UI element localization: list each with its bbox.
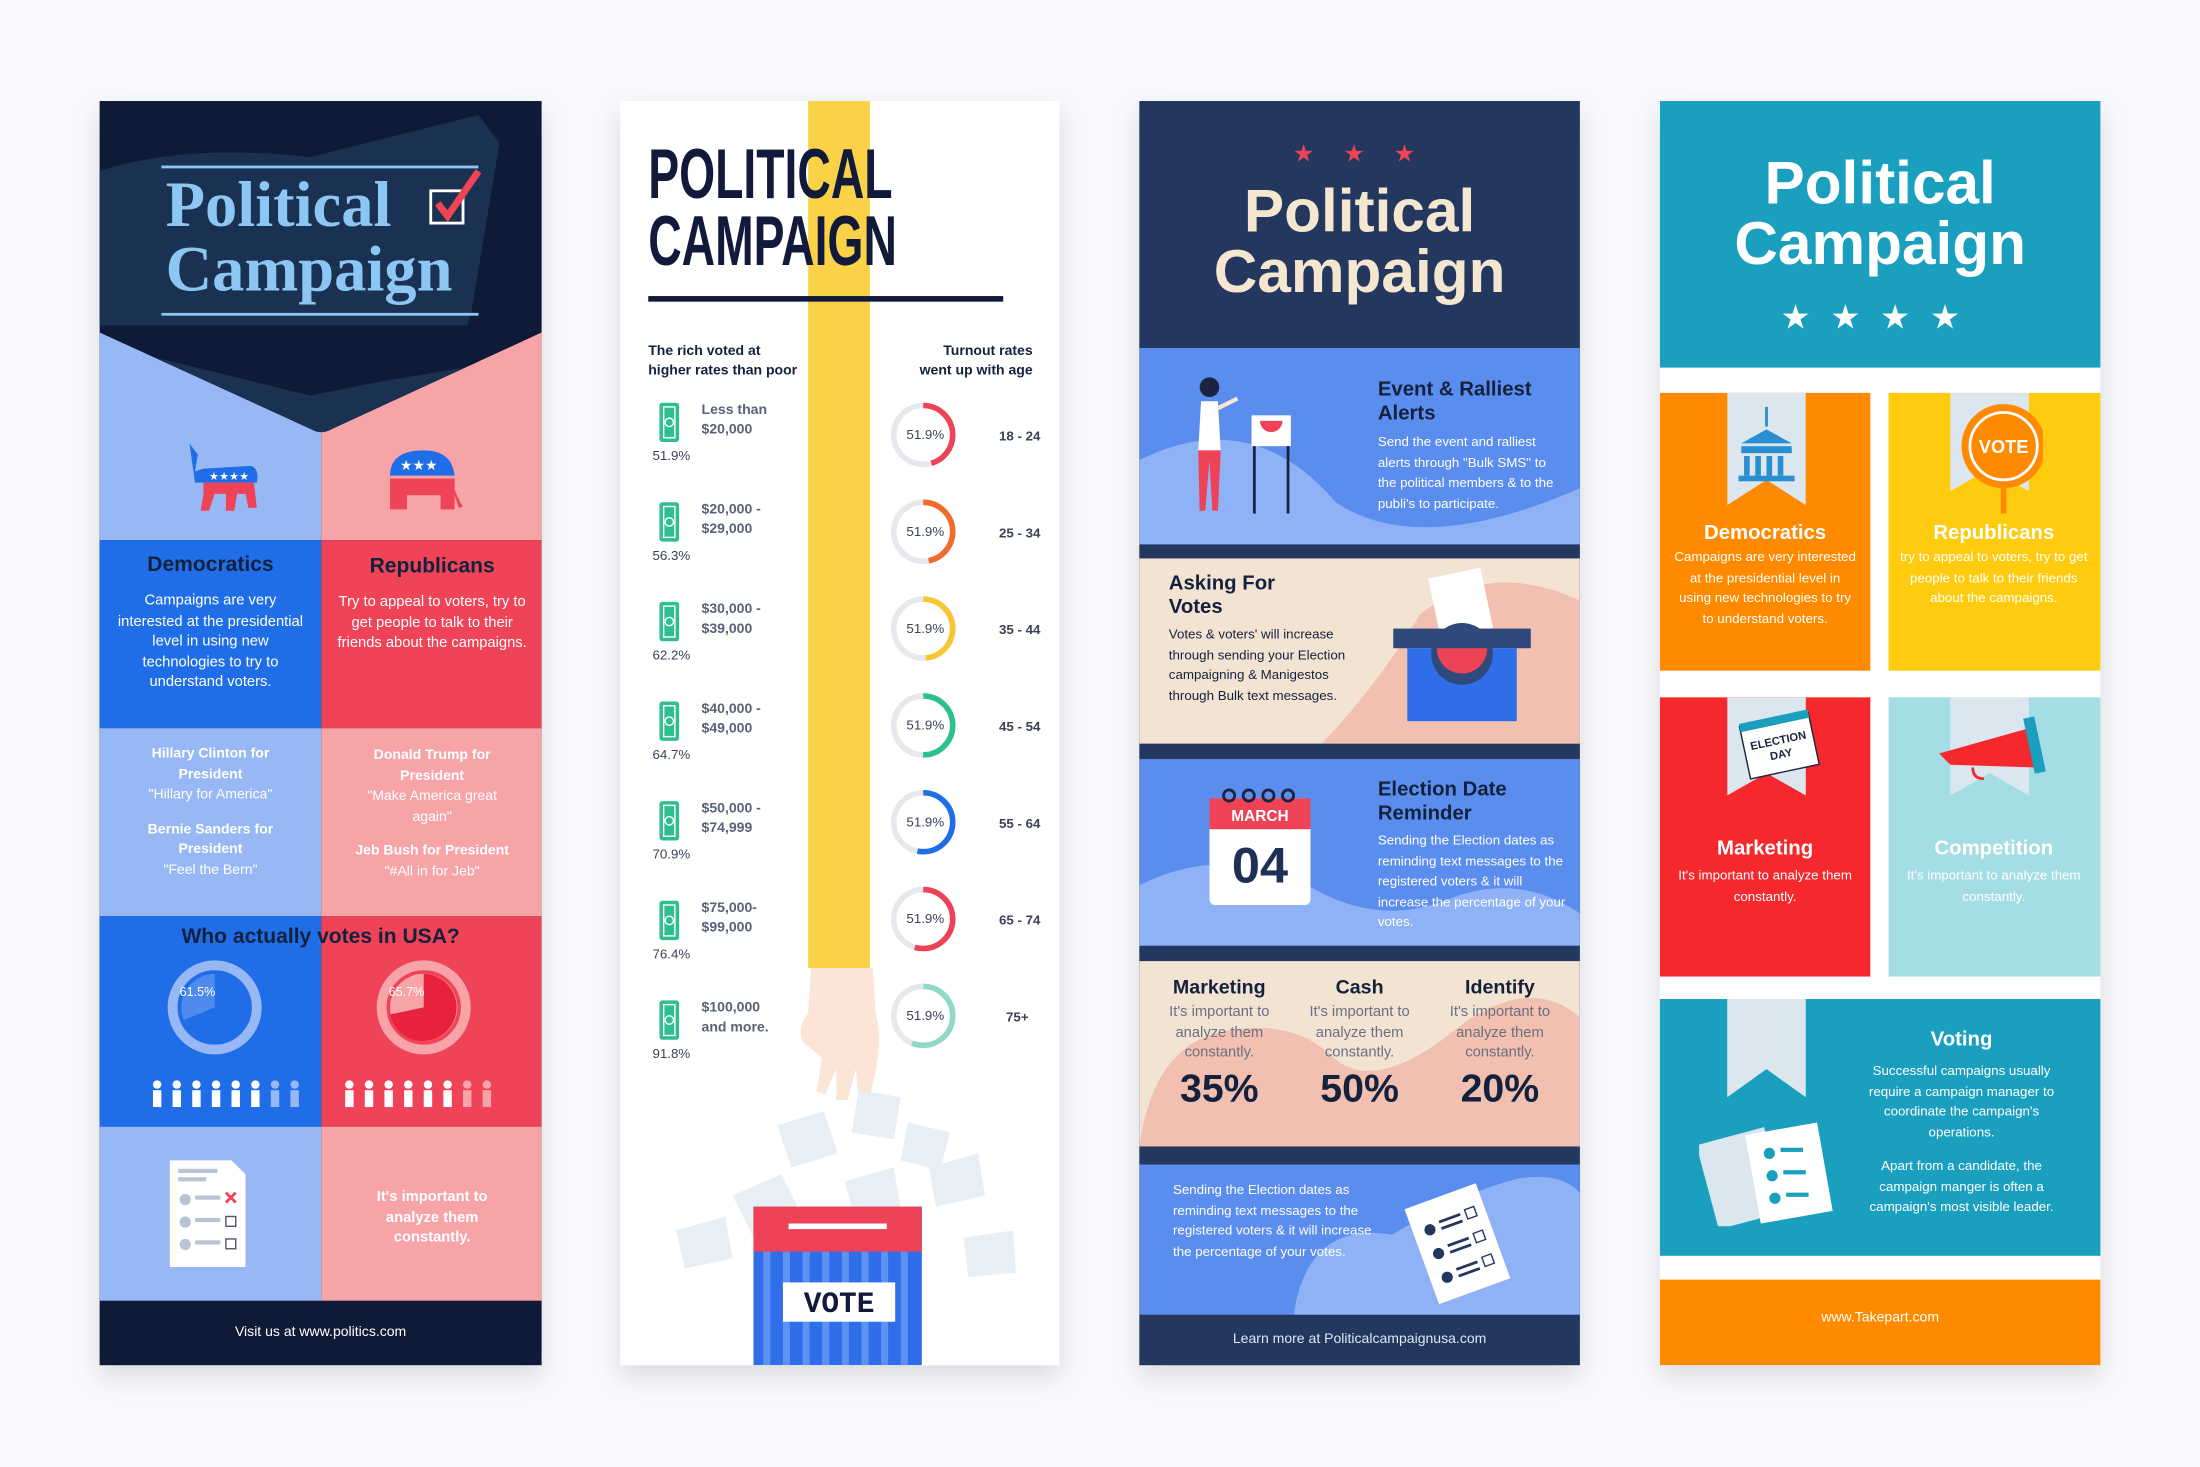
heading: turnout rates: went up with age xyxy=(920,363,1033,379)
panel: democrats vs republicans xyxy=(100,101,542,1365)
text block: democrat candidates xyxy=(148,746,273,878)
text block: republican candidates xyxy=(355,748,509,879)
section: stats: 20% xyxy=(1461,1066,1539,1109)
section: stats: 50% xyxy=(1320,1066,1399,1109)
chart: age donuts: 55 - 64 xyxy=(999,816,1041,831)
icon: people rows xyxy=(152,1080,492,1108)
tile: democratics: Campaigns are very interested at the presidential level in using new technologies to try to understand voters. xyxy=(1674,550,1856,626)
tile: voting: Voting xyxy=(1931,1028,1992,1051)
tile: marketing: ELECTION xyxy=(1749,729,1807,753)
icon: donkey xyxy=(190,444,258,511)
heading: rich voted xyxy=(648,344,797,379)
section: stats: 35% xyxy=(1180,1066,1259,1109)
chart: age donuts: 35 - 44 xyxy=(999,622,1041,637)
footer: Learn more at Politicalcampaignusa.com xyxy=(1233,1332,1486,1347)
chart: age donuts: 51.9% xyxy=(906,1008,944,1023)
panel: tiles xyxy=(1660,101,2100,1365)
panel: alerts and reminders xyxy=(1139,101,1580,1365)
section: election date reminder: Election Date Reminder xyxy=(1378,779,1507,825)
background color blocks xyxy=(100,115,542,1301)
chart: republican donut xyxy=(376,960,471,1054)
section: election date reminder: Sending the Election dates as reminding text messages to the registered voters & it will increase the percentage of your votes. xyxy=(1378,833,1565,930)
chart: age donuts: 18 - 24 xyxy=(999,429,1041,444)
text block: important: It's important to analyze them constantly. xyxy=(377,1188,488,1246)
text block: republican candidates: "#All in for Jeb" xyxy=(385,864,480,879)
section: stats: It's important to analyze them constantly. xyxy=(1309,1003,1410,1061)
tile: marketing: DAY xyxy=(1769,747,1794,763)
chart: age donuts xyxy=(891,402,1041,1048)
title: Political xyxy=(1244,178,1475,246)
tile: competition: Competition xyxy=(1934,838,2053,860)
footer: Visit us at www.politics.com xyxy=(235,1325,406,1340)
panel: rich vs poor turnout xyxy=(620,101,1059,1365)
chart: income rows: 62.2% xyxy=(652,648,690,664)
heading: rich voted: higher rates than poor xyxy=(648,363,797,379)
section: stats: Identify xyxy=(1465,975,1535,998)
tile: democratics: Democratics xyxy=(1704,522,1826,544)
section: event alerts: Event & Ralliest Alerts xyxy=(1378,379,1532,425)
section: asking for votes: Votes & voters' will increase through sending your Election campaigning & Manigestos through Bulk text messages. xyxy=(1169,627,1345,704)
text block: democrat candidates: Hillary Clinton for President xyxy=(152,746,269,782)
heading: turnout rates: Turnout rates xyxy=(943,344,1033,359)
icon: donkey: ★★★★ xyxy=(209,471,249,483)
header: Political xyxy=(1764,150,1996,217)
text block: democrat candidates: "Hillary for America" Bernie Sanders for President xyxy=(148,787,273,857)
section: stats xyxy=(1139,961,1580,1146)
tile: democratics xyxy=(1660,393,1870,671)
section: asking for votes: Votes xyxy=(1169,596,1223,619)
chart: income rows: $40,000 - $49,000 xyxy=(702,702,761,736)
text block: republican candidates: "Make America great again" Jeb Bush for President xyxy=(355,789,509,859)
title: Political xyxy=(166,168,391,240)
chart: age donuts: 51.9% xyxy=(906,524,944,539)
chart: income rows: $20,000 - $29,000 xyxy=(702,502,761,537)
chart: income rows: $50,000 - $74,999 xyxy=(702,801,761,836)
icon: elephant: ★★★ xyxy=(400,457,438,473)
chart: income rows: 56.3% xyxy=(652,549,690,564)
tile: republicans: try to appeal to voters, try to get people to talk to their friends about the campaigns. xyxy=(1900,550,2088,606)
chart: income rows: 70.9% xyxy=(652,847,690,863)
header: Campaign xyxy=(1734,210,2026,278)
section: election date reminder: 04 xyxy=(1232,837,1288,894)
header: ★★★★ xyxy=(1780,299,1980,337)
text block: republicans: Republicans xyxy=(370,554,495,578)
icon: hand dropping ballots: VOTE xyxy=(804,1287,874,1321)
footer xyxy=(1660,1280,2100,1365)
tile: voting: Successful campaigns usually require a campaign manager to coordinate the campaign's operations. Apart from a candidate, the campaign manger is often a campaign's most visible leader. xyxy=(1869,1064,2054,1215)
chart: income rows: $100,000 and more. xyxy=(702,1000,769,1035)
chart: age donuts: 65 - 74 xyxy=(999,913,1041,928)
tile: voting xyxy=(1660,999,2100,1256)
section: asking for votes: Asking For xyxy=(1169,572,1275,595)
tile: republicans xyxy=(1889,393,2100,671)
chart: income rows: 51.9% xyxy=(652,449,690,464)
chart: income rows xyxy=(652,402,769,1062)
icon: elephant xyxy=(390,450,463,510)
chart: age donuts: 51.9% xyxy=(906,814,944,829)
title xyxy=(161,166,482,316)
section: election date reminder: MARCH xyxy=(1231,808,1289,825)
icon: ballot document xyxy=(170,1160,246,1267)
section: reminder text: Sending the Election dates as reminding text messages to the registered voters & it will increase the percentage of your votes. xyxy=(1173,1183,1372,1259)
text block: democratics: Democratics xyxy=(147,553,274,577)
section: stats: It's important to analyze them constantly. xyxy=(1450,1003,1550,1061)
tile: marketing: Marketing xyxy=(1717,838,1813,860)
title: CAMPAIGN xyxy=(648,202,897,281)
icon: stars: ★ ★ ★ xyxy=(1293,140,1426,167)
section: event alerts: Send the event and ralliest alerts through "Bulk SMS" to the political members & to the publi's to participate. xyxy=(1378,435,1553,511)
title xyxy=(648,135,897,281)
text block: republicans xyxy=(338,554,527,651)
icon: hand dropping ballots xyxy=(676,968,1016,1366)
chart: age donuts: 51.9% xyxy=(906,427,944,442)
section: election date reminder xyxy=(1139,759,1580,946)
tile: republicans: VOTE xyxy=(1979,436,2028,457)
tile: competition xyxy=(1889,697,2100,977)
section: event alerts xyxy=(1139,348,1580,544)
chart: income rows: Less than $20,000 xyxy=(702,403,767,437)
yellow column xyxy=(808,101,870,968)
heading: turnout rates xyxy=(920,344,1033,379)
section: asking for votes xyxy=(1139,558,1580,744)
chart: income rows: 64.7% xyxy=(652,748,690,763)
chart: age donuts: 45 - 54 xyxy=(999,719,1041,734)
chart: age donuts: 51.9% xyxy=(906,621,944,636)
title: Campaign xyxy=(1214,239,1505,306)
chart: age donuts: 51.9% xyxy=(906,911,944,926)
chart: democrat donut xyxy=(168,960,262,1054)
tile: marketing: It's important to analyze them constantly. xyxy=(1678,869,1852,904)
title xyxy=(1214,178,1505,306)
chart: republican donut: 65.7% xyxy=(389,985,424,999)
section: stats: It's important to analyze them constantly. xyxy=(1169,1003,1269,1061)
heading: who votes: Who actually votes in USA? xyxy=(181,925,460,948)
heading: rich voted: The rich voted at xyxy=(648,344,761,359)
text block: democrat candidates: "Feel the Bern" xyxy=(163,862,258,878)
text block: republicans: Try to appeal to voters, try to get people to talk to their friends about the campaigns. xyxy=(338,594,527,651)
text block: republican candidates: Donald Trump for President xyxy=(374,748,491,784)
chart: age donuts: 25 - 34 xyxy=(999,525,1041,540)
chart: democrat donut: 61.5% xyxy=(180,985,215,999)
tile: republicans: Republicans xyxy=(1933,522,2054,544)
chart: income rows: $30,000 - $39,000 xyxy=(702,602,761,636)
chart: income rows: 91.8% xyxy=(652,1047,690,1062)
title: POLITICAL xyxy=(648,135,893,213)
footer: www.Takepart.com xyxy=(1821,1310,1939,1326)
header xyxy=(1660,101,2100,368)
tile: competition: It's important to analyze them constantly. xyxy=(1907,869,2081,904)
chart: age donuts: 51.9% xyxy=(906,718,944,733)
text block: democratics: Campaigns are very interested at the presidential level in using new technologies to try to understand voters. xyxy=(118,592,303,691)
chart: age donuts: 75+ xyxy=(1006,1009,1029,1024)
chart: income rows: $75,000- $99,000 xyxy=(702,901,757,935)
tile: marketing xyxy=(1660,697,1870,977)
section: stats: Cash xyxy=(1336,975,1384,998)
chart: income rows: 76.4% xyxy=(652,947,690,963)
title: Campaign xyxy=(166,233,452,304)
section: stats: Marketing xyxy=(1173,975,1266,998)
section: reminder text xyxy=(1139,1165,1580,1315)
